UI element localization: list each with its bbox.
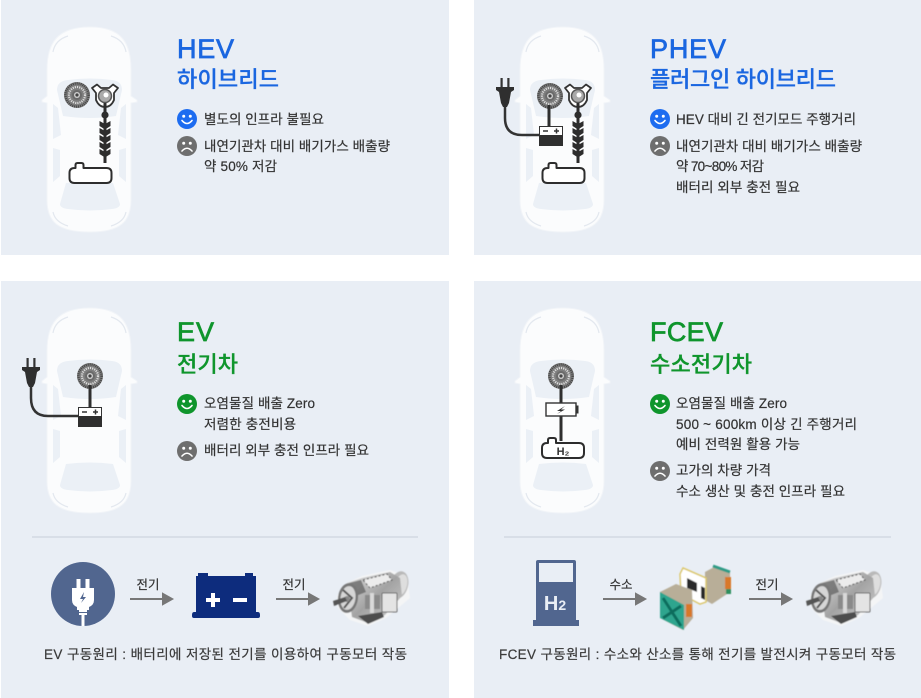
icon: plug circle xyxy=(51,562,115,626)
heading: PHEV: PHEV xyxy=(650,34,726,64)
panel: EV xyxy=(1,281,449,698)
arrow xyxy=(603,594,645,604)
list: HEV pros and cons: 별도의 인프라 불필요 xyxy=(204,112,324,127)
icon: battery xyxy=(192,573,260,618)
heading: HEV xyxy=(177,34,279,92)
diagram: EV drive principle xyxy=(51,562,411,626)
list: FCEV pros and cons: 오염물질 배출 Zero xyxy=(676,396,787,411)
arrow xyxy=(130,594,172,604)
icon: FCEV car diagram: H₂ xyxy=(557,446,570,458)
label: 전기: 전기 xyxy=(755,578,779,592)
list: EV pros and cons: 배터리 외부 충전 인프라 필요 xyxy=(204,443,369,458)
list: FCEV pros and cons: 수소 생산 및 충전 인프라 필요 xyxy=(676,484,845,499)
panel: HEV xyxy=(1,0,449,255)
arrow xyxy=(276,594,318,604)
label: 전기: 전기 xyxy=(136,578,160,592)
list: HEV pros and cons xyxy=(177,109,390,174)
caption: FCEV: FCEV 구동원리 : 수소와 산소를 통해 전기를 발전시켜 구동모터 작동 xyxy=(499,647,896,662)
caption: EV: EV 구동원리 : 배터리에 저장된 전기를 이용하여 구동모터 작동 xyxy=(44,647,407,662)
list: EV pros and cons xyxy=(177,394,369,461)
panel: FCEV xyxy=(474,281,921,698)
list: EV pros and cons: 오염물질 배출 Zero xyxy=(204,396,315,411)
panel: PHEV xyxy=(474,0,921,255)
label: 수소: 수소 xyxy=(609,578,633,592)
icon: hydrogen pump: H2 xyxy=(544,593,566,615)
icon: motor xyxy=(806,569,884,626)
heading: FCEV: 수소전기차 xyxy=(650,352,752,377)
arrow xyxy=(749,594,791,604)
list: HEV pros and cons: 내연기관차 대비 배기가스 배출량 xyxy=(204,139,390,154)
list: FCEV pros and cons: 500 ~ 600km 이상 긴 주행거리 xyxy=(676,417,857,432)
icon: EV car diagram xyxy=(22,308,137,513)
heading: PHEV xyxy=(650,34,836,92)
list: FCEV pros and cons xyxy=(650,394,857,499)
heading: EV: EV xyxy=(177,317,214,347)
list: EV pros and cons: 저렴한 충전비용 xyxy=(204,417,296,432)
icon: FCEV car diagram xyxy=(515,308,610,513)
heading: FCEV xyxy=(650,317,752,377)
heading: HEV: HEV xyxy=(177,34,234,64)
icon: HEV car diagram xyxy=(42,27,137,232)
list: PHEV pros and cons xyxy=(650,109,862,195)
list: HEV pros and cons: 약 50% 저감 xyxy=(204,159,277,174)
list: PHEV pros and cons: HEV 대비 긴 전기모드 주행거리 xyxy=(676,112,856,127)
heading: PHEV: 플러그인 하이브리드 xyxy=(650,67,836,92)
heading: EV xyxy=(177,317,238,377)
list: FCEV pros and cons: 예비 전력원 활용 가능 xyxy=(676,437,800,452)
heading: EV: 전기차 xyxy=(177,352,238,377)
heading: HEV: 하이브리드 xyxy=(177,67,279,92)
icon: fuel cell stack xyxy=(660,566,731,630)
icon: motor xyxy=(333,569,411,626)
list: PHEV pros and cons: 약 70~80% 저감 xyxy=(676,159,764,174)
diagram: FCEV drive principle xyxy=(533,560,884,630)
list: FCEV pros and cons: 고가의 차량 가격 xyxy=(676,463,771,478)
heading: FCEV: FCEV xyxy=(650,317,723,347)
icon: hydrogen pump xyxy=(533,560,579,626)
list: PHEV pros and cons: 내연기관차 대비 배기가스 배출량 xyxy=(676,139,862,154)
icon: PHEV car diagram xyxy=(496,27,610,232)
list: PHEV pros and cons: 배터리 외부 충전 필요 xyxy=(676,180,800,195)
label: 전기: 전기 xyxy=(282,578,306,592)
